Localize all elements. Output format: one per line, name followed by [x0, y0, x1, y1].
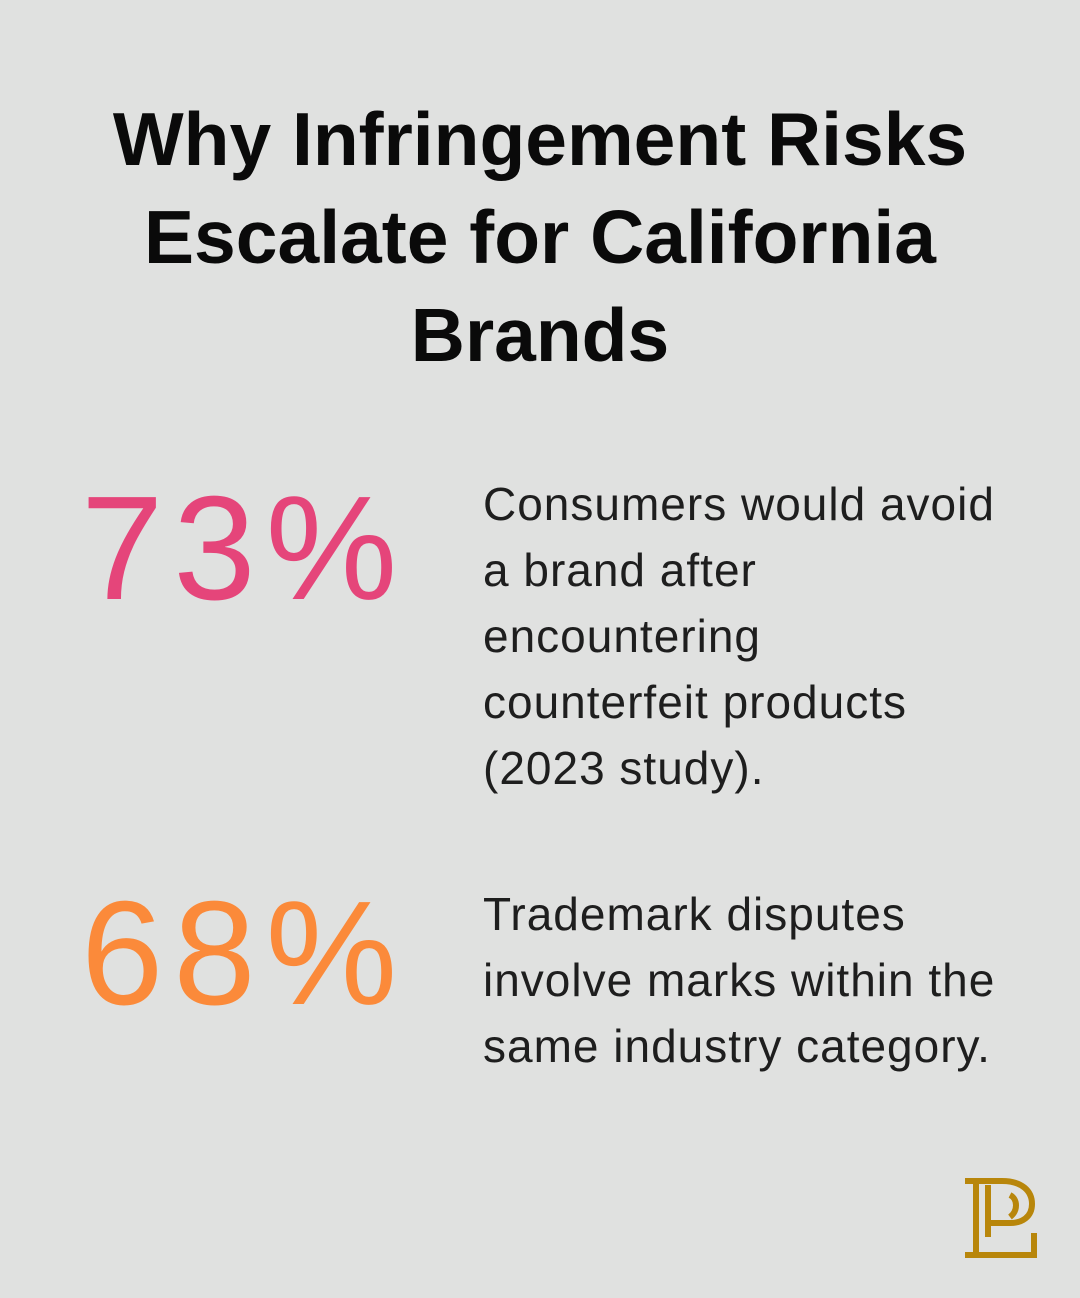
text: 73% description	[483, 478, 995, 794]
text: 73% description: (2023 study).	[483, 742, 764, 794]
title: Why Infringement Risks	[113, 97, 967, 181]
stat: 68%: 68%	[81, 871, 407, 1036]
text: 73% description: Consumers would avoid	[483, 478, 995, 530]
title: Escalate for California	[144, 195, 936, 279]
title	[113, 97, 967, 377]
logo	[965, 1178, 1037, 1258]
text: 68% description: same industry category.	[483, 1020, 991, 1072]
title: Brands	[411, 293, 669, 377]
text: 73% description: a brand after	[483, 544, 757, 596]
text: 73% description: counterfeit products	[483, 676, 907, 728]
stat: 73%: 73%	[81, 466, 407, 631]
text: 68% description: involve marks within the	[483, 954, 995, 1006]
text: 68% description	[483, 888, 995, 1072]
text: 68% description: Trademark disputes	[483, 888, 906, 940]
text: 73% description: encountering	[483, 610, 761, 662]
